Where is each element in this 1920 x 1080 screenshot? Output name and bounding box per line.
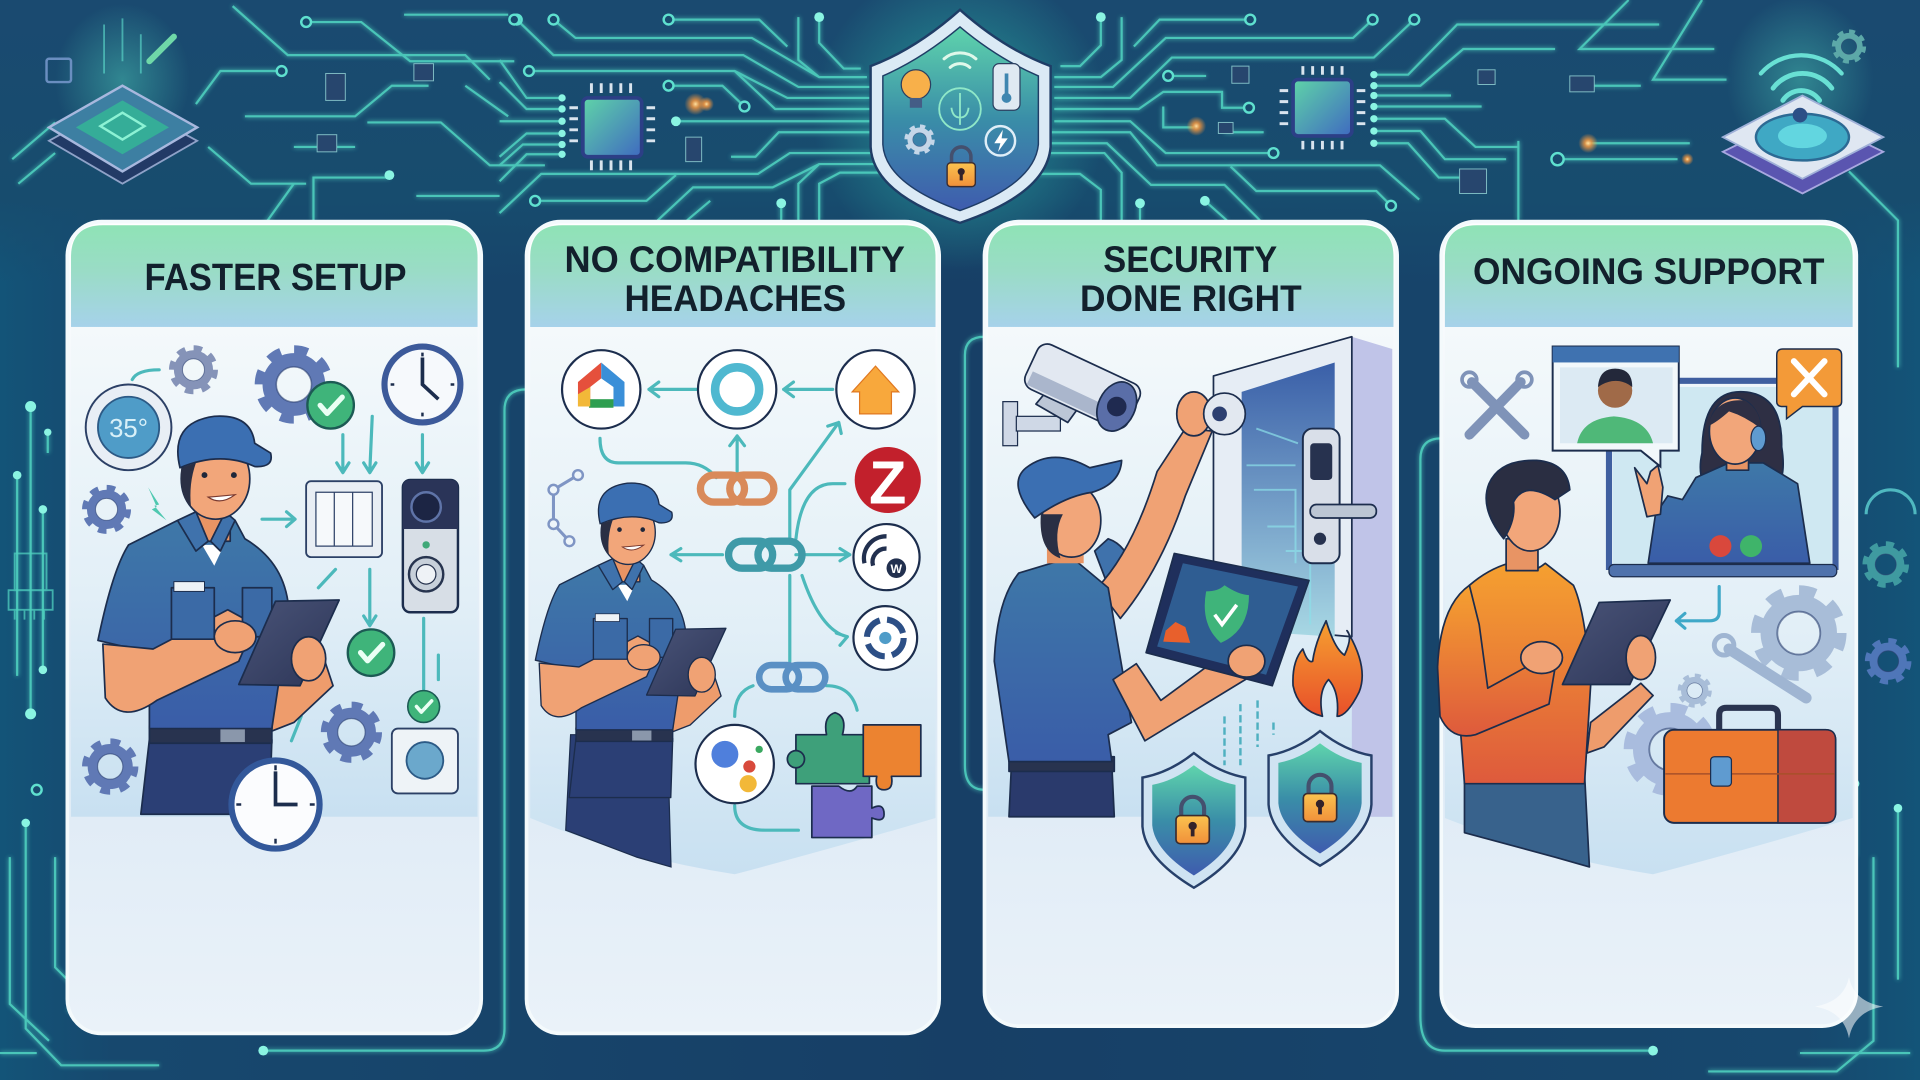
speech bubble tools bbox=[1777, 349, 1842, 419]
icon: link teal bbox=[729, 541, 802, 568]
icon: protocol badge bbox=[853, 606, 917, 670]
call buttons bbox=[1709, 535, 1762, 557]
heading: FASTER SETUP bbox=[144, 257, 407, 299]
circuit device left side bbox=[9, 553, 53, 620]
icon: google home bbox=[562, 350, 640, 429]
icon: microphone ring bbox=[939, 88, 981, 130]
heading: DONE RIGHT bbox=[1080, 278, 1302, 319]
icon: check top bbox=[307, 382, 354, 429]
icon: link orange bbox=[700, 475, 774, 502]
icon: thermostat bbox=[86, 384, 171, 470]
icon: z-wave badge: Z bbox=[869, 448, 906, 516]
icon: wi-fi badge bbox=[853, 524, 920, 590]
icon: thermometer bbox=[993, 64, 1020, 110]
side gears right bbox=[1866, 490, 1915, 681]
heading bbox=[1080, 239, 1302, 319]
video call window bbox=[1553, 347, 1679, 467]
small chips bbox=[317, 64, 1594, 193]
icon: light bulb bbox=[901, 70, 931, 108]
icon: puzzle bbox=[787, 713, 921, 838]
icon: check small bbox=[408, 691, 440, 722]
icon: shield lock left bbox=[1142, 753, 1245, 888]
support agent bbox=[1635, 392, 1810, 563]
icon: toolbox bbox=[1664, 708, 1836, 823]
microchip right bbox=[1280, 66, 1365, 149]
icon: link blue bbox=[759, 665, 825, 689]
icon: crossed tools bbox=[1462, 372, 1532, 435]
icon: lightning bbox=[986, 126, 1015, 156]
icon: z-wave badge bbox=[855, 447, 921, 516]
data streams bbox=[1224, 700, 1273, 765]
icon: smart sensor bbox=[392, 729, 458, 793]
icon: gear bbox=[907, 127, 932, 152]
heading bbox=[564, 239, 905, 319]
icon: wi-fi badge: W bbox=[891, 562, 903, 576]
heading: SECURITY bbox=[1103, 239, 1277, 280]
laptop with support agent bbox=[1609, 381, 1837, 577]
isometric wifi device top right bbox=[1723, 0, 1883, 193]
icon: video doorbell bbox=[403, 480, 458, 612]
icon: gears and wrench bbox=[1631, 592, 1839, 789]
door bbox=[1213, 337, 1392, 817]
icon: network nodes bbox=[549, 470, 583, 546]
icon: flame bbox=[1293, 621, 1362, 716]
technician rear view bbox=[994, 392, 1251, 817]
icon: smart home bbox=[836, 350, 915, 429]
technician bbox=[535, 483, 726, 867]
smart lock bbox=[1303, 429, 1376, 563]
icon: light switch bbox=[306, 481, 382, 557]
heading: NO COMPATIBILITY bbox=[564, 239, 905, 280]
icon: padlock bbox=[947, 147, 975, 187]
technician bbox=[98, 416, 339, 814]
sparkle mark bbox=[1815, 977, 1883, 1038]
panel: no compatibility headaches bbox=[527, 222, 939, 1033]
heading: HEADACHES bbox=[624, 278, 846, 319]
return arrow bbox=[1676, 587, 1719, 628]
icon: gears bbox=[86, 349, 377, 790]
orange signal lights bbox=[684, 93, 1693, 165]
icon: google assistant bbox=[696, 725, 774, 803]
icon: clock top bbox=[384, 347, 460, 422]
panel: faster setup bbox=[67, 222, 481, 1033]
heading: ONGOING SUPPORT bbox=[1473, 251, 1825, 292]
icon: shield lock right bbox=[1269, 731, 1371, 866]
shield emblem bbox=[871, 10, 1051, 223]
microchip left bbox=[569, 83, 655, 170]
panel: security done right bbox=[984, 222, 1397, 1026]
icon: wifi bbox=[944, 53, 976, 67]
icon: check middle bbox=[348, 629, 394, 676]
connection arrows bbox=[600, 382, 857, 830]
hand on tablet bbox=[1228, 645, 1265, 677]
icon: security camera bbox=[1003, 340, 1144, 446]
icon: lightning bbox=[148, 487, 167, 520]
icon: alexa ring bbox=[698, 350, 776, 429]
arrows bbox=[132, 370, 438, 741]
icon: thermostat: 35° bbox=[109, 415, 148, 443]
icon: clock bottom bbox=[231, 760, 320, 849]
isometric chip top left bbox=[47, 4, 197, 184]
customer bbox=[1438, 460, 1670, 867]
tablet with shield bbox=[1146, 553, 1309, 686]
panel: ongoing support bbox=[1438, 222, 1856, 1026]
